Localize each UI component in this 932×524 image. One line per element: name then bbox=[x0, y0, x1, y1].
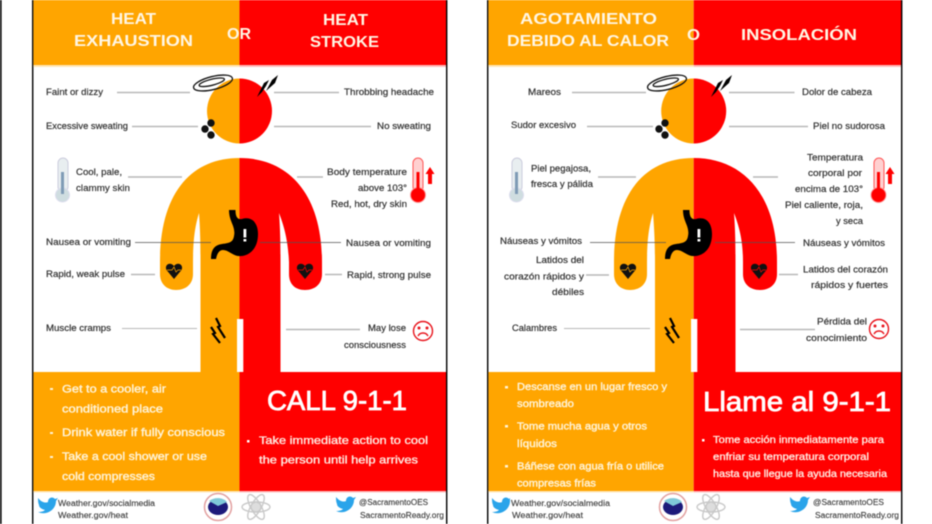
icon: emergency services seal bbox=[697, 492, 725, 522]
panel: agotamiento actions bbox=[488, 372, 694, 492]
header: heat exhaustion: HEAT bbox=[111, 11, 156, 28]
icon: stomach bbox=[211, 210, 258, 259]
header: heat stroke: HEAT bbox=[323, 12, 368, 29]
symptom labels: insolacion: Piel no sudorosa bbox=[813, 121, 885, 131]
panel: heat exhaustion actions: Drink water if fully conscious bbox=[62, 427, 226, 439]
icon: hot thermometer bbox=[871, 158, 894, 202]
icon: sad face bbox=[414, 322, 432, 340]
header: agotamiento: AGOTAMIENTO bbox=[520, 11, 657, 28]
symptom labels: heat exhaustion: Rapid, weak pulse bbox=[46, 269, 125, 279]
icon: sweat drops bbox=[655, 119, 669, 139]
footer: weather links bbox=[492, 498, 611, 520]
symptom labels: heat exhaustion: Nausea or vomiting bbox=[46, 237, 131, 247]
symptom labels: heat stroke: Rapid, strong pulse bbox=[347, 270, 431, 280]
footer: Sacramento links: @SacramentoOES bbox=[359, 498, 428, 507]
header: agotamiento bbox=[488, 0, 694, 67]
icon: headache bolts bbox=[257, 75, 278, 97]
icon: emergency services seal bbox=[242, 492, 270, 522]
icon: muscle cramps bbox=[665, 318, 679, 343]
icon: pulse heart right bbox=[297, 264, 313, 279]
panel: agotamiento actions: Descanse en un lugar fresco y bbox=[517, 381, 668, 393]
footer: weather links bbox=[38, 498, 156, 520]
symptom labels: heat exhaustion bbox=[46, 87, 211, 333]
icon: cool thermometer bbox=[56, 158, 70, 202]
panel: insolacion actions: Tome acción inmediatamente para bbox=[713, 435, 884, 446]
panel: heat exhaustion actions: conditioned place bbox=[62, 404, 163, 416]
icon: sweat drops bbox=[201, 119, 215, 139]
header: insolacion: INSOLACIÓN bbox=[741, 25, 857, 44]
icon: pulse heart right bbox=[751, 264, 767, 279]
panel: heat stroke actions: the person until help arrives bbox=[259, 454, 419, 466]
icon: stomach bbox=[665, 210, 712, 259]
symptom labels: agotamiento: Piel pegajosa, bbox=[531, 164, 591, 174]
panel: heat exhaustion actions: Get to a cooler, air bbox=[62, 384, 166, 396]
symptom labels: insolacion: Piel caliente, roja, bbox=[785, 200, 863, 210]
symptom labels: agotamiento: Náuseas y vómitos bbox=[500, 236, 583, 246]
heading: o: O bbox=[687, 27, 700, 44]
icon: hot thermometer bbox=[410, 158, 434, 202]
symptom labels: heat stroke: No sweating bbox=[377, 121, 431, 131]
symptom labels: insolacion: Latidos del corazón bbox=[803, 264, 888, 274]
symptom labels: heat stroke: above 103° bbox=[358, 183, 407, 193]
icon: NOAA logo bbox=[204, 494, 232, 520]
symptom labels: agotamiento: Mareos bbox=[528, 87, 562, 97]
panel: heat exhaustion actions: Take a cool shower or use bbox=[62, 451, 207, 463]
footer: Sacramento links: SacramentoReady.org bbox=[360, 511, 444, 520]
footer: weather links: Weather.gov/socialmedia bbox=[58, 499, 156, 508]
symptom labels: insolacion: Temperatura bbox=[807, 152, 863, 162]
icon: headache bolts bbox=[711, 75, 732, 97]
symptom labels: insolacion: rápidos y fuertes bbox=[811, 280, 889, 290]
header: insolacion bbox=[694, 0, 901, 67]
footer: Sacramento links bbox=[336, 497, 444, 520]
footer: Sacramento links: SacramentoReady.org bbox=[815, 511, 899, 520]
panel: agotamiento actions: compresas frías bbox=[517, 478, 596, 490]
panel: insolacion actions: hasta que llegue la ayuda necesaria bbox=[713, 469, 887, 480]
icon: pulse heart left bbox=[166, 264, 182, 279]
icon: sad face bbox=[870, 320, 888, 338]
symptom labels: agotamiento: Calambres bbox=[512, 323, 558, 333]
header: heat exhaustion: EXHAUSTION bbox=[74, 33, 193, 50]
panel: insolacion actions: enfriar su temperatura corporal bbox=[713, 452, 869, 463]
symptom labels: insolacion: conocimiento bbox=[806, 333, 867, 343]
panel: heat stroke actions: CALL 9-1-1 bbox=[267, 385, 407, 416]
symptom labels: heat stroke bbox=[260, 87, 434, 350]
symptom labels: heat exhaustion: Muscle cramps bbox=[46, 323, 112, 333]
panel: agotamiento actions: sombreado bbox=[517, 398, 574, 410]
symptom labels: insolacion: y seca bbox=[836, 216, 863, 226]
symptom labels: heat stroke: May lose bbox=[368, 323, 406, 333]
panel: heat stroke actions: Take immediate action to cool bbox=[259, 435, 428, 447]
symptom labels: heat exhaustion: Cool, pale, bbox=[76, 167, 122, 177]
symptom labels: agotamiento: fresca y pálida bbox=[531, 179, 593, 189]
symptom labels: insolacion: corporal por bbox=[808, 168, 862, 178]
panel: agotamiento actions: líquidos bbox=[517, 438, 557, 450]
icon: muscle cramps bbox=[211, 318, 225, 343]
icon: cool thermometer bbox=[510, 158, 524, 202]
panel: heat exhaustion actions bbox=[33, 372, 240, 492]
panel: Spanish poster bbox=[488, 0, 901, 522]
icon: NOAA logo bbox=[660, 494, 686, 520]
footer: Sacramento links bbox=[790, 497, 899, 520]
symptom labels: heat stroke: Red, hot, dry skin bbox=[331, 199, 407, 209]
symptom labels: heat stroke: Body temperature bbox=[327, 167, 407, 177]
symptom labels: agotamiento bbox=[500, 87, 666, 333]
symptom labels: insolacion: Pérdida del bbox=[817, 316, 867, 326]
footer: weather links: Weather.gov/socialmedia bbox=[511, 499, 611, 508]
panel: heat exhaustion actions: cold compresses bbox=[62, 471, 156, 483]
symptom labels: insolacion bbox=[715, 87, 889, 343]
footer: weather links: Weather.gov/heat bbox=[512, 511, 584, 520]
icon: dizzy halo bbox=[192, 72, 234, 94]
header: agotamiento: DEBIDO AL CALOR bbox=[507, 33, 669, 50]
symptom labels: heat exhaustion: Excessive sweating bbox=[46, 121, 128, 131]
header: heat stroke: STROKE bbox=[310, 34, 379, 51]
symptom labels: heat stroke: Nausea or vomiting bbox=[346, 238, 431, 248]
panel: insolacion actions: Llame al 9-1-1 bbox=[703, 386, 891, 417]
symptom labels: insolacion: Náuseas y vómitos bbox=[803, 238, 886, 248]
panel: heat stroke actions bbox=[240, 372, 446, 492]
header: heat stroke bbox=[240, 0, 446, 67]
symptom labels: heat stroke: consciousness bbox=[344, 340, 407, 350]
symptom labels: heat exhaustion: clammy skin bbox=[76, 183, 130, 193]
symptom labels: heat stroke: Throbbing headache bbox=[344, 87, 434, 97]
symptom labels: heat exhaustion: Faint or dizzy bbox=[46, 87, 104, 97]
header: heat exhaustion bbox=[33, 0, 240, 67]
icon: dizzy halo bbox=[646, 72, 688, 94]
panel: agotamiento actions: Báñese con agua fría o utilice bbox=[517, 460, 664, 472]
symptom labels: agotamiento: Latidos del bbox=[536, 255, 584, 265]
symptom labels: insolacion: Dolor de cabeza bbox=[802, 87, 872, 97]
icon: pulse heart left bbox=[620, 264, 636, 279]
panel: agotamiento actions: Tome mucha agua y otros bbox=[517, 420, 647, 432]
footer: weather links: Weather.gov/heat bbox=[58, 511, 129, 520]
footer: Sacramento links: @SacramentoOES bbox=[813, 498, 884, 507]
symptom labels: insolacion: encima de 103° bbox=[795, 184, 863, 194]
symptom labels: agotamiento: débiles bbox=[552, 287, 585, 297]
symptom labels: agotamiento: Sudor excesivo bbox=[511, 120, 576, 130]
panel: insolacion actions bbox=[694, 372, 901, 492]
symptom labels: agotamiento: corazón rápidos y bbox=[504, 272, 585, 282]
heading: or: OR bbox=[227, 26, 251, 43]
panel: English poster bbox=[33, 0, 446, 522]
figure: head and body bbox=[614, 78, 777, 372]
figure: head and body bbox=[160, 78, 322, 372]
